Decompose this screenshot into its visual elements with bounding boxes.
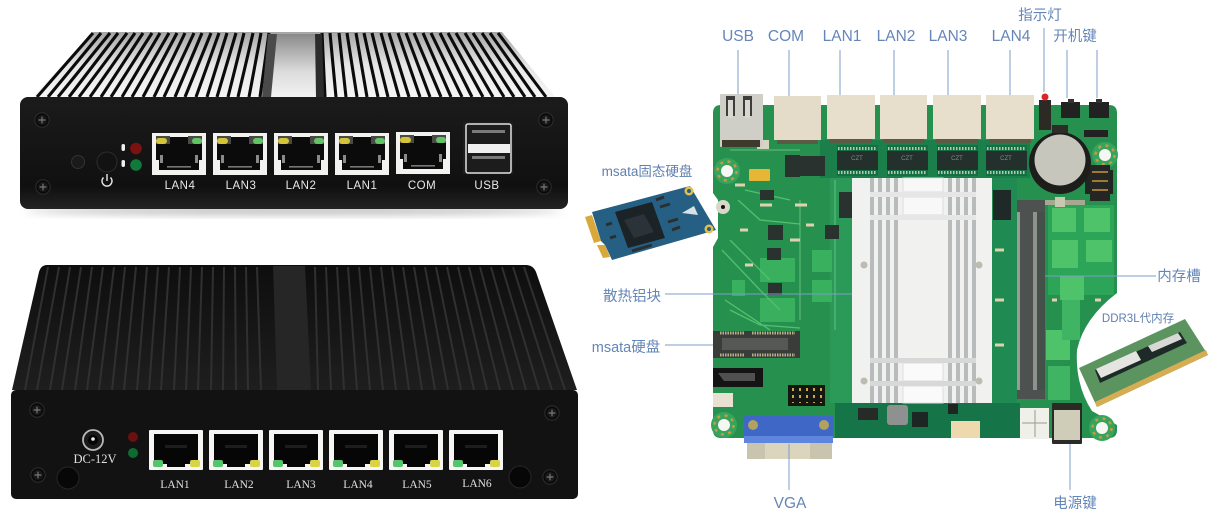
callout: memory slot: 内存槽 — [1157, 268, 1201, 285]
rubber feet — [57, 466, 531, 489]
SATA connector — [713, 368, 763, 387]
LAN labels: LAN3 — [286, 479, 316, 491]
callout: LAN3 — [929, 28, 967, 95]
device shadow — [26, 207, 562, 215]
LAN4 jack — [152, 133, 206, 175]
black heat sink top — [12, 265, 577, 390]
callout: power jack: 电源键 — [1053, 495, 1097, 512]
callout: COM — [768, 28, 804, 96]
LAN labels: LAN1 — [160, 479, 190, 491]
USB connector — [720, 94, 763, 147]
callout: LAN2: LAN2 — [877, 28, 915, 45]
front panel — [20, 97, 568, 209]
callout: LAN1 — [823, 28, 861, 95]
LAN4 connector — [986, 95, 1034, 143]
front labels: LAN4 — [165, 180, 195, 192]
VGA connector — [744, 416, 833, 459]
PCB outline — [713, 105, 1117, 438]
DC jack — [83, 430, 103, 450]
front labels: LAN1 — [347, 180, 377, 192]
barrel jack — [1052, 403, 1082, 444]
front labels: USB — [474, 180, 500, 192]
heat sink top with silver fins — [32, 32, 556, 98]
callout: indicator light — [1018, 7, 1062, 92]
PCB dark and bright zones — [722, 140, 1114, 438]
yellow capacitor — [749, 169, 770, 181]
callout: msata slot — [592, 338, 713, 356]
small white connector — [713, 393, 733, 407]
callout: DDR3L: DDR3L代内存 — [1102, 311, 1174, 325]
callout: USB — [722, 28, 754, 94]
callout: COM: COM — [768, 28, 804, 45]
pin headers — [1090, 165, 1110, 201]
front labels: LAN3 — [226, 180, 256, 192]
panel: mini PC with 6 LAN — [11, 265, 578, 499]
callout: LAN3: LAN3 — [929, 28, 967, 45]
USB port — [463, 122, 513, 174]
LAN labels: LAN4 — [343, 479, 373, 491]
front labels: LAN2 — [286, 180, 316, 192]
callout: LAN1: LAN1 — [823, 28, 861, 45]
LAN2 jack — [274, 133, 328, 175]
msata slot — [713, 331, 800, 358]
LED and header — [1039, 94, 1051, 130]
LAN5 jack — [389, 430, 443, 470]
panel: mini PC front with 4 LAN — [20, 32, 568, 215]
callout: power jack — [1053, 444, 1097, 512]
callout: msata slot: msata硬盘 — [592, 338, 660, 356]
screws — [35, 113, 553, 194]
msata SSD module — [585, 186, 716, 260]
pin header — [788, 385, 825, 406]
LAN labels: LAN5 — [402, 479, 432, 491]
DC-12V label: DC-12V — [73, 452, 117, 466]
callout: power switch — [1053, 28, 1097, 98]
callout: heat sink block: 散热铝块 — [603, 288, 661, 305]
callout: VGA — [774, 444, 807, 512]
LAN2 connector — [880, 95, 927, 143]
LAN6 jack — [449, 430, 503, 470]
coin battery — [1029, 125, 1091, 194]
LAN1 jack — [335, 133, 389, 175]
COM jack — [396, 132, 450, 174]
power buttons — [72, 152, 117, 186]
LAN transformers — [837, 145, 1027, 176]
memory slot — [1017, 197, 1085, 399]
LAN1 jack — [149, 430, 203, 470]
DDR3L memory module — [1079, 319, 1208, 407]
callout: USB: USB — [722, 28, 754, 45]
LAN3 jack — [213, 133, 267, 175]
callout: LAN4 — [992, 28, 1031, 95]
power and reset switches — [1061, 99, 1109, 118]
heat sink — [852, 178, 992, 403]
status LEDs — [122, 143, 142, 171]
status LEDs — [128, 432, 138, 458]
front labels: COM — [408, 180, 436, 192]
LAN2 jack — [209, 430, 263, 470]
front panel — [11, 390, 578, 499]
LAN1 connector — [827, 95, 875, 143]
inductor — [858, 404, 958, 427]
LAN labels: LAN6 — [462, 478, 492, 490]
LAN4 jack — [329, 430, 383, 470]
callout: indicator light: 指示灯 — [1018, 7, 1062, 24]
LAN3 connector — [933, 95, 981, 143]
front labels — [165, 180, 500, 192]
COM connector — [774, 96, 821, 144]
callout: LAN4: LAN4 — [992, 28, 1031, 45]
callout: msata SSD: msata固态硬盘 — [602, 163, 692, 179]
LAN3 jack — [269, 430, 323, 470]
screws — [30, 403, 559, 484]
mounting pads — [711, 142, 1118, 441]
small ICs — [757, 130, 1113, 295]
panel: motherboard — [711, 94, 1118, 459]
ATX power connector — [1020, 408, 1049, 439]
callout: LAN2 — [877, 28, 915, 95]
fan connector — [951, 421, 980, 438]
callout: power switch: 开机键 — [1053, 28, 1097, 45]
callout: VGA: VGA — [774, 495, 807, 512]
LAN labels — [160, 478, 492, 491]
LAN labels: LAN2 — [224, 479, 254, 491]
